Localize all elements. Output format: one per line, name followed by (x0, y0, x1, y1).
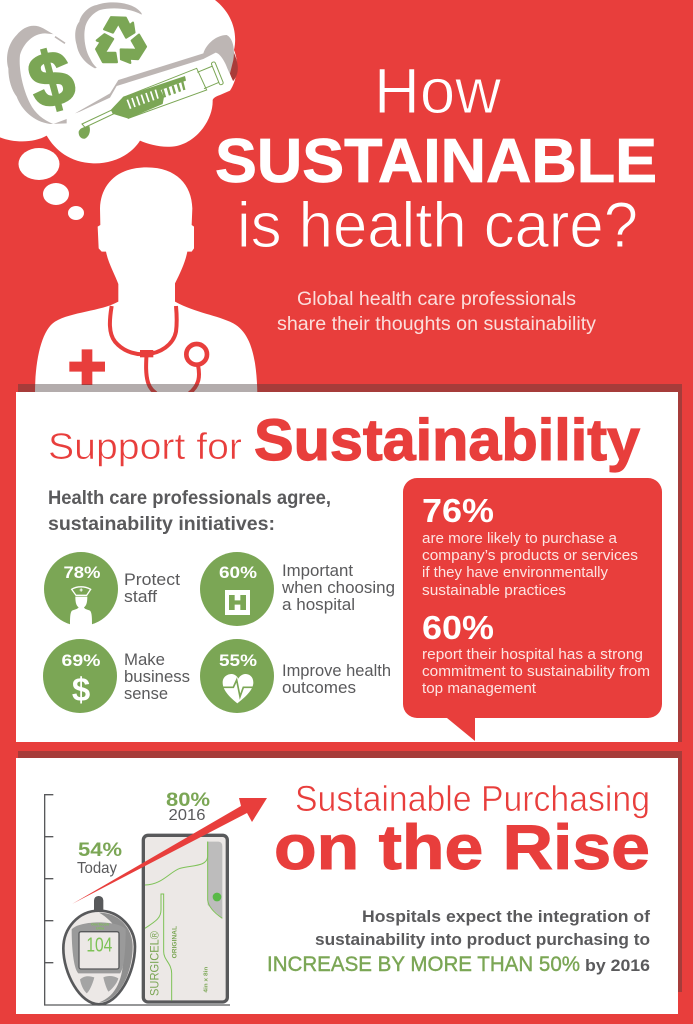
stat: 78% protect staff (44, 552, 180, 627)
title (215, 55, 657, 261)
stat: 55% improve health outcomes: 55% (219, 651, 257, 670)
illustration: surgicel package: 4in x 8in (204, 966, 210, 993)
label: 80% 2016: 2016 (168, 807, 206, 824)
subtitle: share their thoughts on sustainability (277, 314, 597, 335)
title: is health care? (237, 189, 638, 261)
callout: speech bubble statistics: top management (422, 681, 536, 697)
arrow: rising trend (72, 798, 267, 904)
stat: 69% make business sense: sense (124, 685, 168, 703)
stat: 78% protect staff: Protect (124, 571, 180, 589)
label: 54% today: Today (77, 860, 117, 877)
stat: 55% improve health outcomes (200, 639, 391, 713)
stat: 69% make business sense: $ (72, 671, 90, 708)
illustration: surgicel package: ORIGINAL (173, 926, 179, 958)
stat: 60% choosing a hospital: 60% (219, 563, 257, 582)
thought bubbles (18, 148, 84, 220)
stat: 60% choosing a hospital (200, 552, 395, 626)
chart: axis (45, 795, 230, 1005)
intro text: Health care professionals agree, (48, 488, 331, 509)
callout: speech bubble statistics: are more likely to purchase a (422, 531, 618, 547)
heading: support for sustainability (48, 408, 640, 473)
label: 54% today: 54% (78, 839, 122, 861)
label: 54% today (77, 839, 122, 877)
callout: speech bubble statistics: commitment to sustainability from (422, 664, 650, 680)
heading: support for sustainability: Support for (48, 426, 242, 467)
stat: 78% protect staff: 78% (64, 563, 100, 582)
callout: speech bubble statistics: company’s products or services (422, 548, 638, 564)
text block: purchasing forecast: sustainability into product purchasing to (315, 930, 650, 949)
title: How (374, 55, 502, 127)
callout: speech bubble statistics: 60% (422, 609, 494, 646)
stat: 55% improve health outcomes: Improve health (282, 662, 391, 680)
illustration: glucose meter (63, 896, 135, 1004)
heading: support for sustainability: Sustainability (254, 408, 640, 473)
callout: speech bubble statistics: if they have environmentally (422, 565, 609, 581)
label: 80% 2016: 80% (166, 789, 210, 811)
stat: 60% choosing a hospital: when choosing (281, 579, 395, 597)
icon: syringe (72, 35, 234, 142)
stat: 69% make business sense (43, 639, 190, 713)
callout: speech bubble statistics: report their hospital has a strong (422, 647, 643, 663)
panel shadows (18, 384, 682, 992)
stat: 55% improve health outcomes: outcomes (282, 679, 356, 697)
text block: purchasing forecast: Hospitals expect the integration of (362, 907, 650, 926)
stat: 69% make business sense: 69% (62, 651, 100, 670)
illustration: glucose meter: Ultra (96, 927, 105, 931)
callout: speech bubble statistics: 76% (422, 492, 494, 529)
stat: 69% make business sense: business (124, 668, 190, 686)
callout: speech bubble statistics: sustainable practices (422, 583, 566, 599)
intro text (48, 488, 331, 535)
text block: purchasing forecast: by 2016 (585, 956, 650, 975)
stat: 78% protect staff: staff (124, 588, 157, 606)
subtitle: Global health care professionals (297, 289, 576, 310)
text block: purchasing forecast (267, 907, 650, 976)
heading: sustainable purchasing on the rise: on the Rise (274, 813, 650, 883)
icon: recycle symbol (75, 2, 149, 72)
illustration: glucose meter: 104 (86, 934, 112, 957)
illustration: glucose meter: OneTouch (91, 922, 109, 926)
subtitle (277, 289, 597, 335)
panel: sustainable purchasing (16, 758, 678, 1014)
panel: support for sustainability (16, 392, 678, 742)
text block: purchasing forecast: INCREASE BY MORE THAN 50% (267, 953, 580, 976)
stat: 60% choosing a hospital: Important (282, 562, 353, 580)
heading: sustainable purchasing on the rise (274, 778, 650, 883)
title: SUSTAINABLE (215, 127, 657, 196)
stat: 69% make business sense: Make (124, 651, 165, 669)
illustration: surgicel package (143, 835, 227, 1002)
icon: dollar sign: $ (20, 33, 83, 126)
stat: 60% choosing a hospital: a hospital (282, 596, 355, 614)
illustration: thought cloud with icons (0, 0, 238, 163)
callout: speech bubble statistics (403, 478, 662, 741)
heading: sustainable purchasing on the rise: Sustainable Purchasing (295, 778, 650, 819)
intro text: sustainability initiatives: (48, 514, 275, 535)
icon: doctor silhouette with stethoscope (35, 167, 257, 393)
label: 80% 2016 (166, 789, 210, 824)
illustration: surgicel package: SURGICEL® (148, 931, 161, 996)
